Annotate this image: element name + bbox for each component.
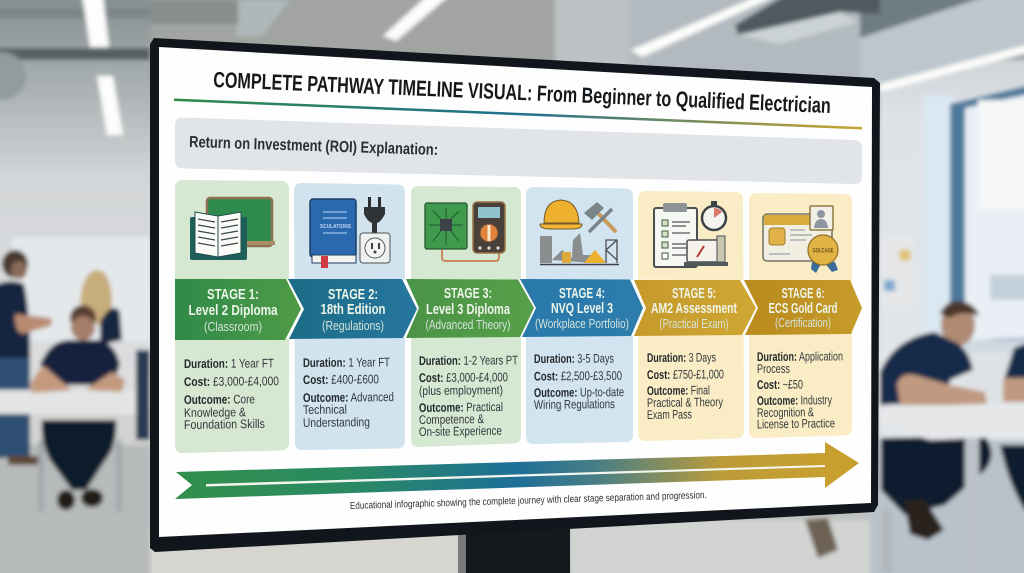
stage 4 details: Wiring Regulations — [534, 397, 615, 412]
stage 3 chevron: STAGE 3: — [444, 286, 492, 302]
stage 6 details — [757, 349, 843, 431]
stage 2 details: Outcome: Advanced — [303, 390, 394, 405]
stage 3 details: On-site Experience — [419, 424, 502, 439]
table right — [881, 402, 1024, 573]
title rule — [174, 98, 862, 130]
icon: regulations book, plug and socket — [310, 197, 390, 268]
stage 5 chevron: STAGE 5: — [672, 286, 716, 302]
caption: Educational infographic showing the complete journey with clear stage separation and progression. — [350, 490, 707, 512]
stage 6 chevron — [744, 280, 862, 335]
stage 5 chevron: AM2 Assessment — [651, 301, 737, 317]
stage 4 details: Outcome: Up-to-date — [534, 385, 624, 400]
stage 3 details: Duration: 1-2 Years PT — [419, 353, 518, 368]
stage 3 details: Competence & — [419, 412, 485, 427]
stage 5 chevron: (Practical Exam) — [660, 316, 728, 331]
icon: circuit board and multimeter — [425, 202, 505, 261]
stage 6 details: Process — [757, 362, 790, 376]
icon: hard hat, tools and construction site — [540, 200, 619, 264]
stage 3 details: (plus employment) — [419, 383, 503, 398]
stage 1 details — [184, 356, 279, 432]
panel: ROI explanation — [175, 117, 862, 184]
icon: regulations book, plug and socket: SCULATIONS — [320, 224, 351, 230]
stage 1 chevron — [175, 279, 301, 340]
stage 1 chevron: STAGE 1: — [207, 287, 259, 303]
window — [923, 84, 1024, 407]
ROI heading: Return on Investment (ROI) Explanation: — [189, 134, 438, 159]
stage 3 chevron: (Advanced Theory) — [426, 317, 510, 332]
stage band backing — [175, 279, 862, 340]
stage 1 chevron: (Classroom) — [204, 319, 262, 334]
person: standing man left — [0, 250, 52, 465]
shoe below monitor — [805, 518, 838, 558]
stage 2 chevron: 18th Edition — [320, 302, 386, 318]
stage 6 chevron: STAGE 6: — [782, 286, 824, 302]
stage 4 chevron — [520, 279, 643, 337]
stage 2 details: Cost: £400-£600 — [303, 372, 379, 387]
stage 4 details: Cost: £2,500-£3,500 — [534, 369, 622, 383]
stage 2 details: Technical — [303, 402, 347, 417]
icon: checklist clipboard, stopwatch and laptop — [654, 201, 728, 267]
icon: ECS gold card with seal: GOLCAGE — [812, 248, 834, 254]
stage 2 chevron: (Regulations) — [322, 318, 384, 333]
poster — [882, 236, 914, 310]
stage 6 details: License to Practice — [757, 416, 835, 431]
stage 2 details: Duration: 1 Year FT — [303, 355, 390, 370]
screen — [159, 47, 872, 537]
person: right edge — [1000, 342, 1024, 518]
monitor stand — [458, 525, 570, 573]
stage 1 details: Outcome: Core — [184, 392, 255, 407]
stage 3 chevron — [406, 279, 534, 338]
icon: ECS gold card with seal — [763, 206, 838, 273]
stage 2 chevron: STAGE 2: — [328, 287, 378, 303]
stage 1 details: Cost: £3,000-£4,000 — [184, 374, 279, 389]
stage 5 details: Practical & Theory — [647, 395, 724, 410]
stage 1 details: Knowledge & — [184, 405, 247, 420]
stage 5 details: Exam Pass — [647, 407, 692, 422]
stage 6 chevron: (Certification) — [775, 315, 831, 330]
stage 3 details: Outcome: Practical — [419, 400, 503, 415]
stage 4 chevron: NVQ Level 3 — [551, 301, 613, 317]
ceiling beams and ducts — [0, 0, 880, 100]
stage 1 chevron: Level 2 Diploma — [188, 303, 278, 319]
stage 4 details: Duration: 3-5 Days — [534, 351, 614, 366]
progress arrow — [175, 442, 859, 499]
stage 1 details: Foundation Skills — [184, 417, 265, 432]
ceiling lights — [82, 0, 1024, 135]
stage 3 details — [419, 353, 518, 439]
stage 6 details: Cost: ~£50 — [757, 378, 803, 392]
stage 2 details: Understanding — [303, 415, 370, 430]
stage 4 chevron: (Workplace Portfolio) — [535, 316, 629, 331]
stage 4 chevron: STAGE 4: — [559, 286, 605, 302]
stage 1 details: Duration: 1 Year FT — [184, 356, 274, 371]
stage 3 details: Cost: £3,000-£4,000 — [419, 370, 508, 385]
stage 6 details: Duration: Application — [757, 349, 843, 364]
whiteboard — [12, 237, 150, 341]
monitor frame — [150, 38, 880, 552]
stage 6 chevron: ECS Gold Card — [768, 301, 838, 317]
stage 2 details — [303, 355, 394, 430]
person: seated man right — [880, 301, 992, 540]
stage 5 details: Outcome: Final — [647, 383, 710, 398]
stage 2 chevron — [288, 279, 417, 339]
person: blond woman — [80, 270, 122, 345]
stage 4 details — [534, 351, 624, 412]
stage 5 details — [647, 351, 724, 422]
table left — [0, 390, 148, 414]
stage 5 details: Duration: 3 Days — [647, 351, 716, 365]
stage 6 details: Recognition & — [757, 405, 815, 420]
icon: book and chalkboard — [190, 198, 275, 260]
stage 3 chevron: Level 3 Diploma — [426, 302, 511, 318]
stage 6 details: Outcome: Industry — [757, 393, 833, 408]
panel: stage cards backgrounds — [175, 180, 852, 453]
person: seated man left — [30, 305, 150, 512]
floor — [0, 415, 1024, 573]
stage 5 details: Cost: £750-£1,000 — [647, 367, 724, 382]
stage 5 chevron — [634, 280, 756, 336]
